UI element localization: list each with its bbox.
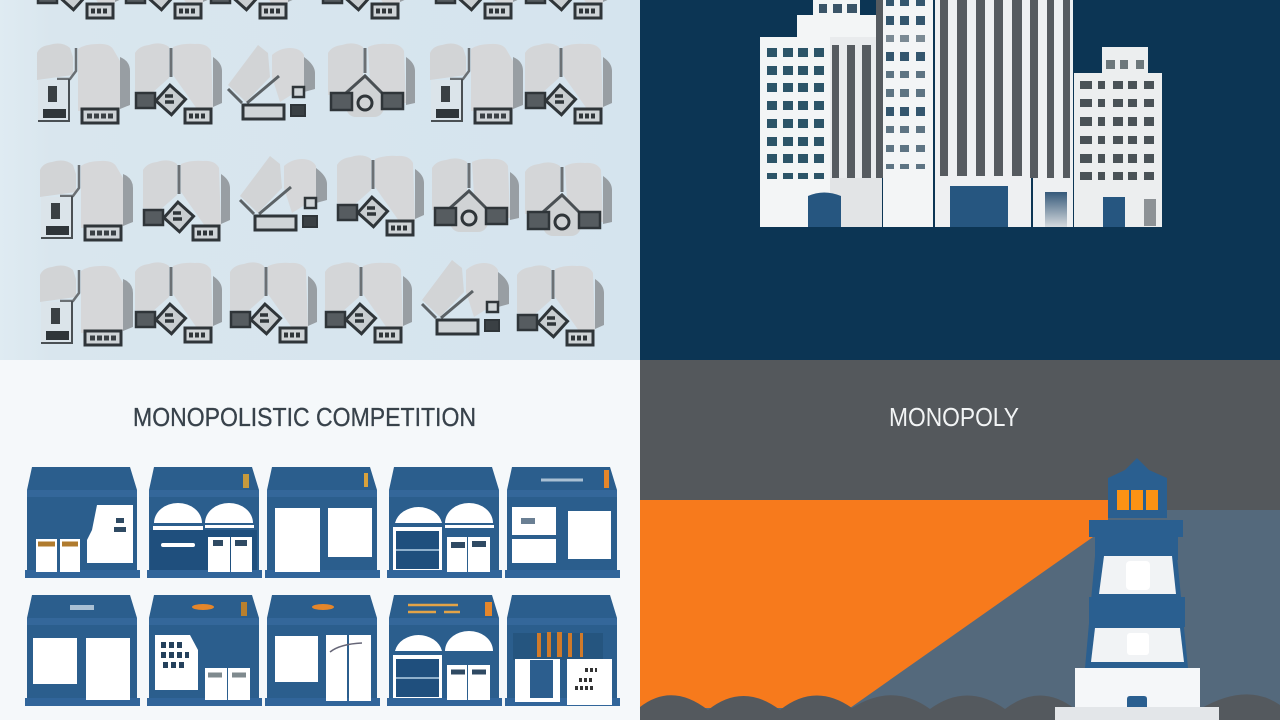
shop 4 [387,467,502,578]
building: left tower [760,0,883,227]
row of identical stalls, fourth [40,260,604,345]
heading: monopolistic competition: MONOPOLISTIC COMPETITION [133,402,476,432]
panel: perfect competition [0,0,640,360]
shop 9 [387,595,502,706]
building group [760,0,1162,227]
white band upper [1099,556,1176,594]
shop 2 [147,467,262,578]
blue band [1089,597,1185,627]
shop 1 [25,467,140,578]
building: right block [1074,47,1162,227]
row of identical stalls, second [37,43,612,123]
shop 6 [25,595,140,706]
light beam [640,500,1108,708]
gallery [1089,520,1183,560]
row of identical stalls, cropped top [37,0,612,18]
door [1127,696,1147,707]
lighthouse [1055,458,1219,720]
shop 5 [505,467,620,578]
panel: monopolistic competition [0,360,640,720]
heading: monopoly: MONOPOLY [889,402,1019,432]
panel: oligopoly [640,0,1280,360]
shop 8 [265,595,380,706]
base [1075,668,1200,707]
shop 10 [505,595,620,706]
plinth [1055,707,1219,720]
building: narrow tower [883,0,933,227]
row of identical stalls, third [40,155,612,240]
lantern room [1108,458,1167,518]
white band lower [1091,628,1184,662]
lantern windows [1117,490,1158,510]
hills [640,694,1280,720]
tower body [1085,556,1188,668]
building: central striped tower [935,0,1073,227]
shop 3 [265,467,380,578]
panel: monopoly [640,360,1280,720]
shop 7 [147,595,262,706]
